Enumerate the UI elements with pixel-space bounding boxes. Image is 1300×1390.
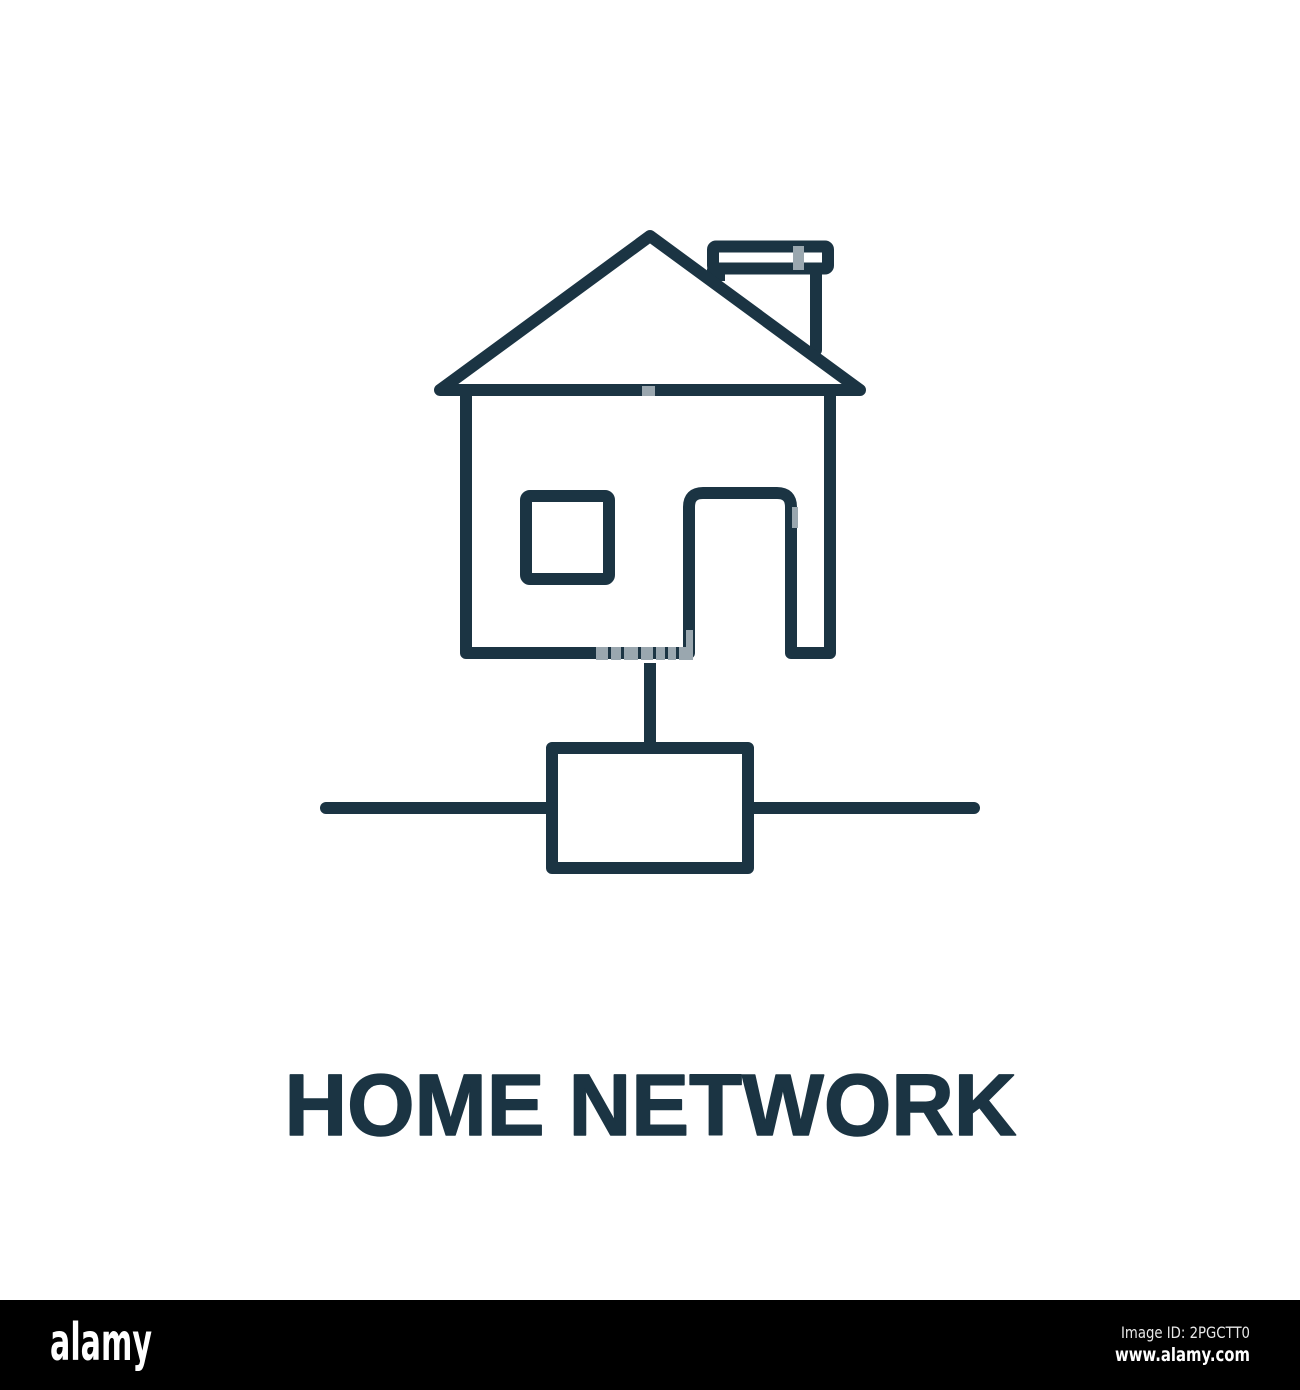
icon: right network line [748,802,974,814]
title: HOME NETWORK [284,1057,1017,1154]
watermark fragments [596,246,804,660]
image id: Image ID: 2PGCTT0 [1121,1323,1250,1342]
icon: network box [552,748,748,868]
icon: left network line [326,802,552,814]
footer bar [0,1300,1300,1390]
website: www.alamy.com [1115,1344,1250,1366]
logo: alamy: alamy [50,1313,152,1373]
icon: roof [440,236,860,390]
icon: house walls and door [466,390,830,653]
icon: window [526,496,609,579]
icon: chimney [713,246,828,350]
icon: home network [326,236,974,868]
icon: connector line [644,663,656,748]
